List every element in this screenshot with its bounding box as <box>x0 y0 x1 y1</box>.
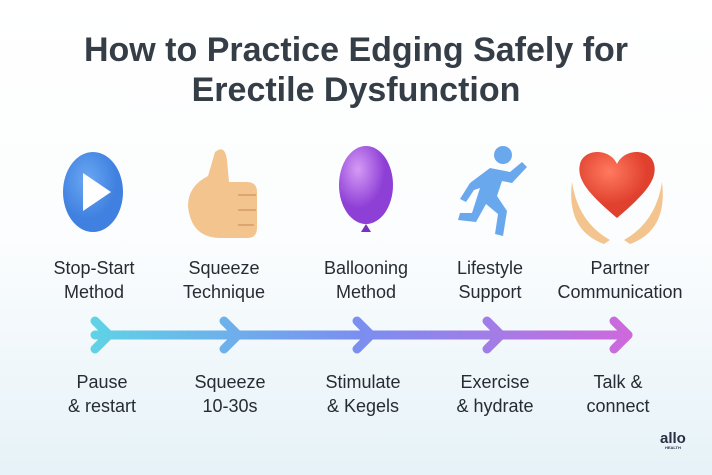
text: Communication <box>557 282 683 302</box>
labels <box>53 258 135 302</box>
title: How to Practice Edging Safely for <box>84 31 628 69</box>
icon: thumbs up <box>188 149 257 238</box>
text: Squeeze <box>194 372 266 392</box>
logo: HEALTH <box>665 445 681 450</box>
text: Partner <box>590 258 650 278</box>
title: Erectile Dysfunction <box>192 71 520 109</box>
labels: Method <box>64 282 124 302</box>
title <box>84 31 628 109</box>
step labels: Pause <box>76 372 128 392</box>
text: Technique <box>183 282 265 302</box>
text: Lifestyle <box>457 258 523 278</box>
labels: Stop-Start <box>53 258 135 278</box>
icon: runner <box>458 146 527 236</box>
text: Squeeze <box>188 258 260 278</box>
icon: heart in hands <box>571 152 663 244</box>
icon: play button <box>63 152 123 232</box>
text: Ballooning <box>324 258 408 278</box>
text: Exercise <box>460 372 530 392</box>
text: Support <box>458 282 522 302</box>
text: & hydrate <box>456 396 534 416</box>
text: connect <box>586 396 650 416</box>
text: Stimulate <box>325 372 401 392</box>
text: Method <box>336 282 396 302</box>
arrow timeline <box>90 316 632 354</box>
text: 10-30s <box>202 396 258 416</box>
text: & Kegels <box>327 396 399 416</box>
icon: balloon <box>339 146 393 232</box>
icons <box>63 146 663 244</box>
step labels: & restart <box>68 396 136 416</box>
step labels <box>68 372 136 416</box>
logo: allo <box>660 430 686 447</box>
text: Talk & <box>593 372 643 392</box>
